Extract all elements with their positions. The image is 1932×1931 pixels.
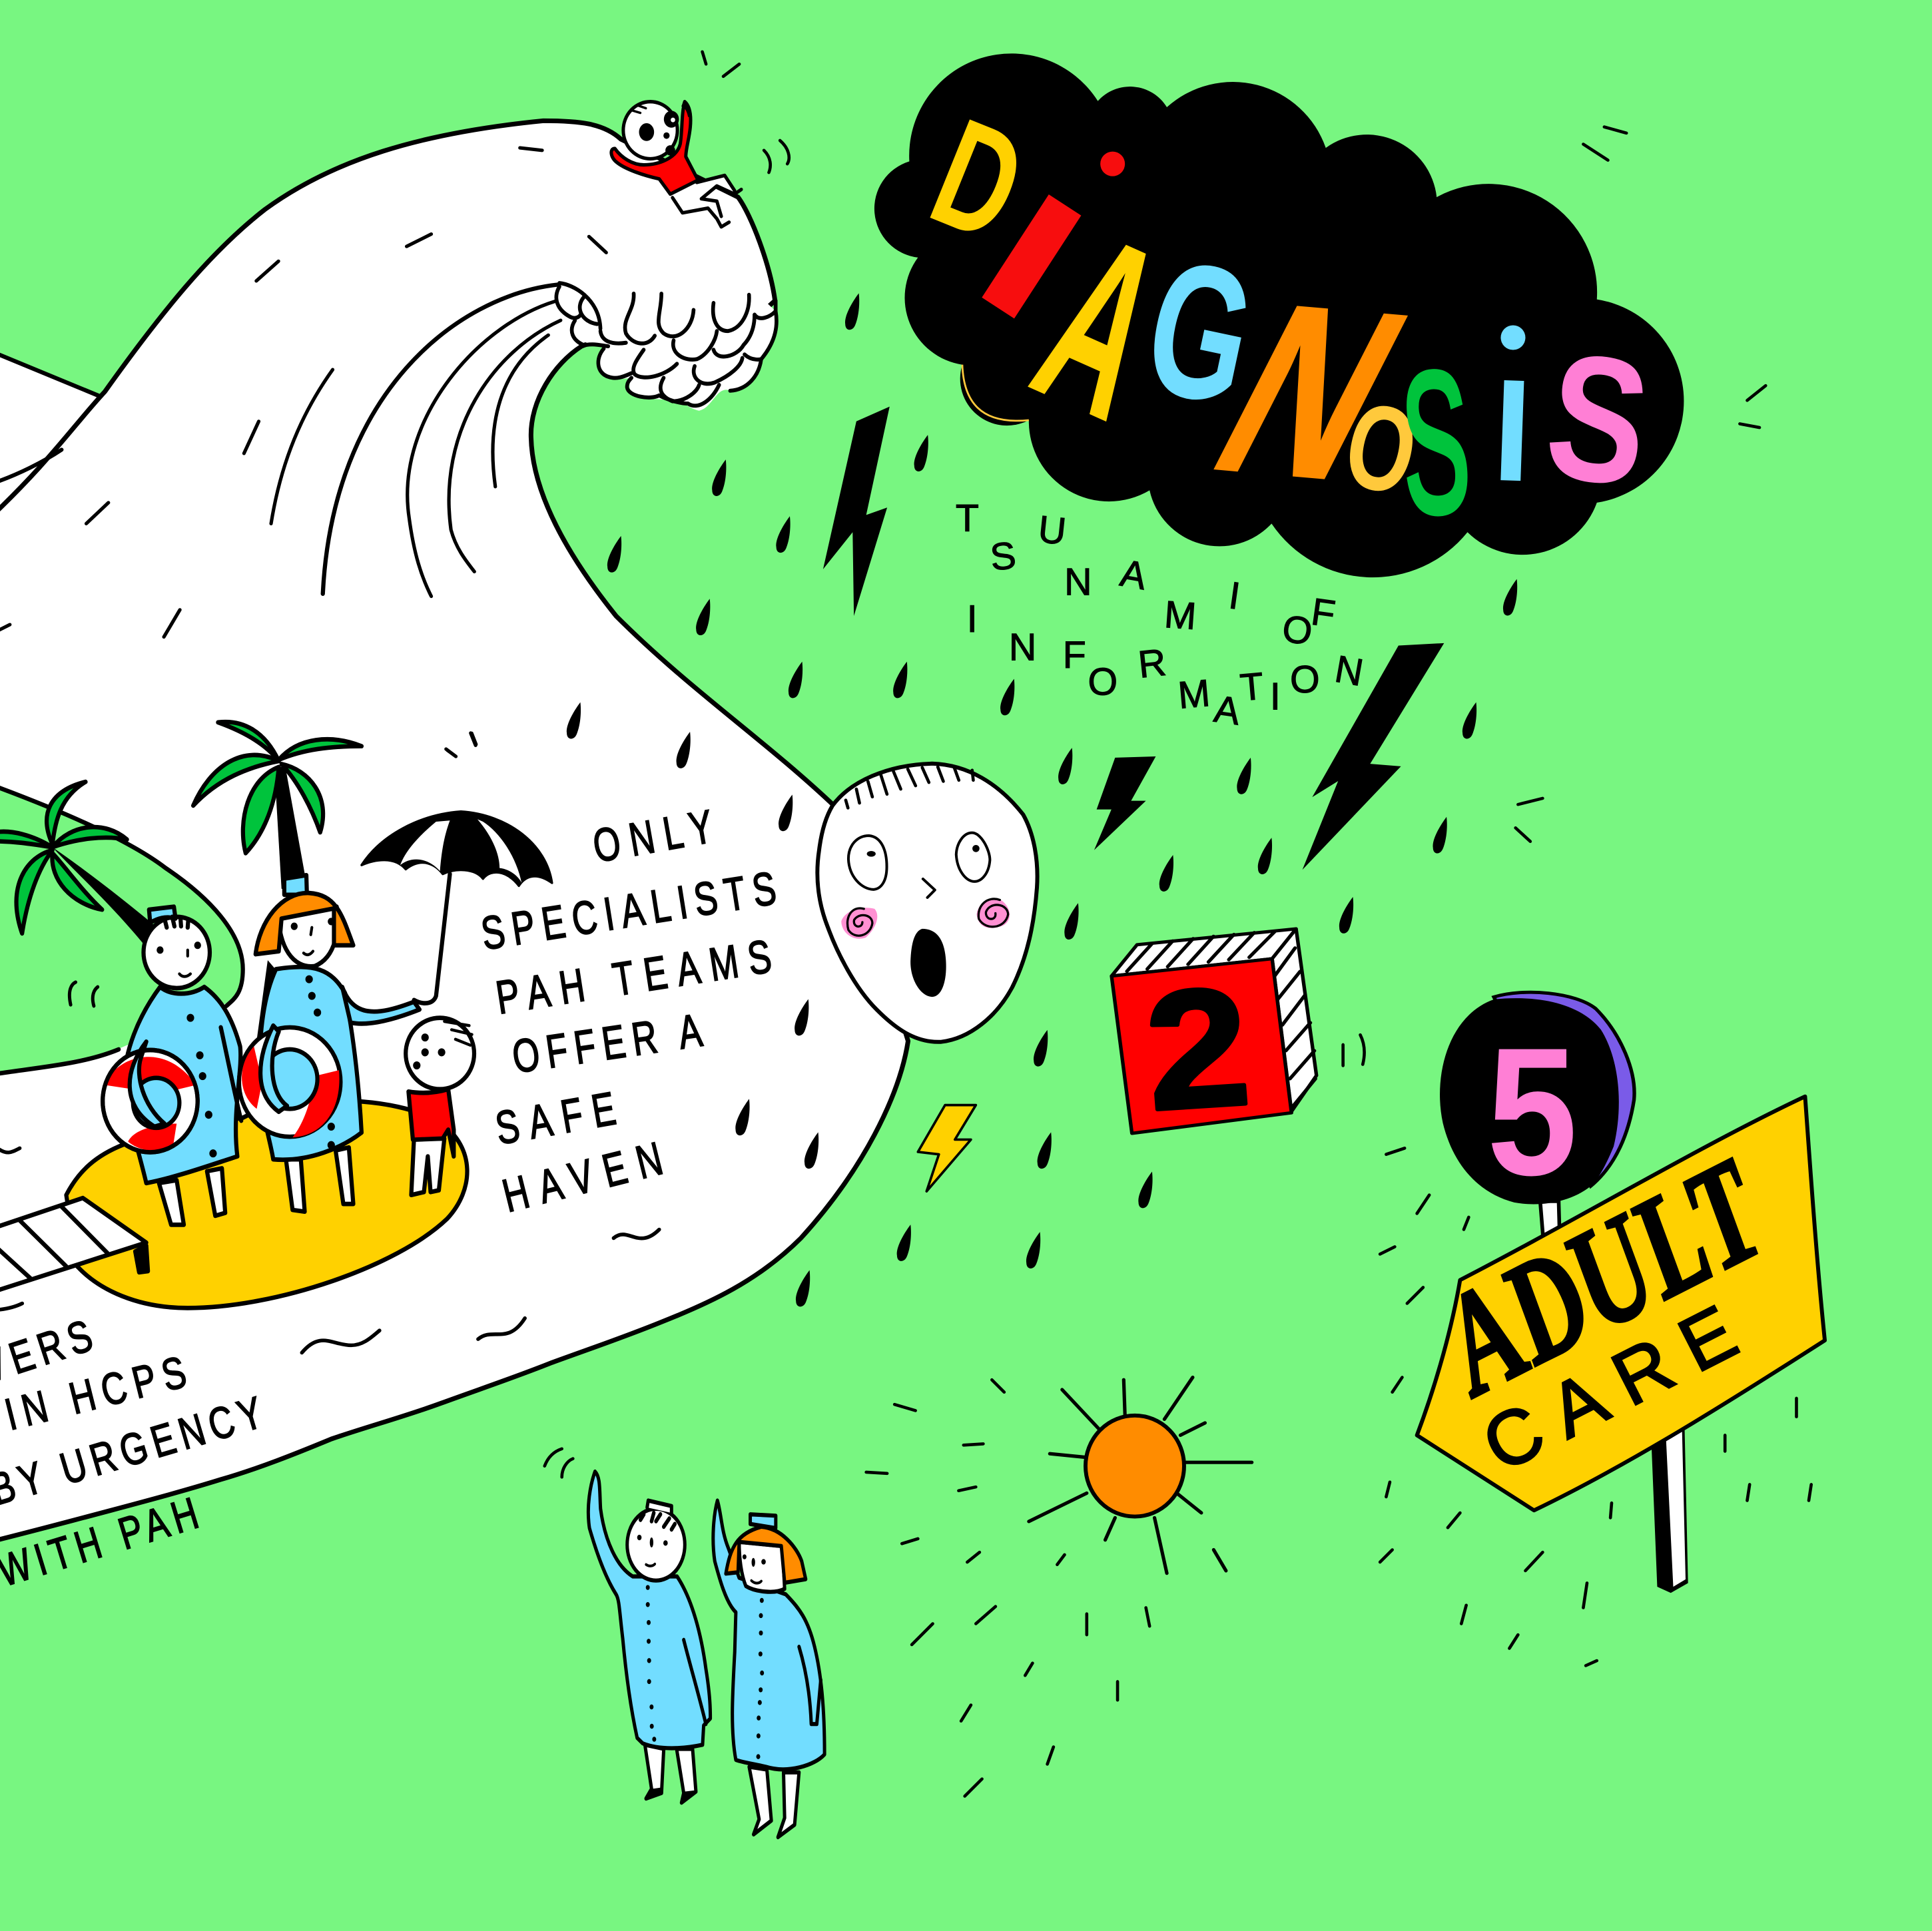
yellow signboard <box>1417 1097 1825 1510</box>
text: cropped wave captions: IN HCPS <box>0 1346 191 1440</box>
text: only specialists PAH teams offer a safe haven: OFFER A <box>509 1004 706 1083</box>
text: only specialists PAH teams offer a safe haven: HAVEN <box>497 1133 668 1223</box>
sand island with nurses, child and umbrella <box>0 722 552 1308</box>
subtitle: tsunami of information: O <box>1290 659 1320 701</box>
screaming face <box>817 764 1038 1042</box>
text: cropped wave captions <box>0 1310 268 1596</box>
badge 5 <box>1440 992 1634 1213</box>
radiating dashes <box>866 1148 1811 1796</box>
subtitle: tsunami of information: F <box>1309 591 1338 636</box>
text: only specialists PAH teams offer a safe haven: PAH TEAMS <box>493 930 775 1024</box>
numbered block 2 <box>1112 929 1317 1145</box>
small motion marks <box>545 52 1766 1477</box>
nurse one with lifebuoy <box>103 907 241 1225</box>
umbrella <box>362 733 552 1003</box>
subtitle: tsunami of information: T <box>1239 665 1265 709</box>
sun <box>1029 1377 1252 1573</box>
title: DIAGNOSIS: S <box>1536 314 1660 525</box>
subtitle: tsunami of information: I <box>1270 676 1281 718</box>
title: DIAGNOSIS: I <box>1490 349 1534 513</box>
rain drops <box>567 293 1517 1306</box>
sign text CARE: CARE <box>1470 1289 1750 1488</box>
subtitle: tsunami of information: S <box>988 534 1018 579</box>
text: only specialists PAH teams offer a safe haven: SPECIALISTS <box>478 862 780 960</box>
subtitle: tsunami of information: T <box>956 497 979 539</box>
waving nurses <box>588 1472 824 1837</box>
waving nurse left <box>588 1472 711 1802</box>
background wave behind <box>0 350 101 555</box>
subtitle: tsunami of information <box>956 497 1367 734</box>
lightning bolts <box>823 407 1444 870</box>
numbered block 2: 2 <box>1139 952 1255 1145</box>
subtitle: tsunami of information: I <box>967 598 978 641</box>
text: only specialists PAH teams offer a safe haven: ONLY <box>589 800 717 873</box>
yellow lightning bolt <box>918 1105 976 1191</box>
title: DIAGNOSIS <box>911 86 1660 556</box>
subtitle: tsunami of information: A <box>1117 552 1150 599</box>
right palm tree <box>193 722 362 1052</box>
yellow island <box>66 1101 467 1308</box>
title: DIAGNOSIS: N <box>1175 253 1447 531</box>
subtitle: tsunami of information: F <box>1063 634 1086 677</box>
title: DIAGNOSIS: A <box>1004 182 1199 471</box>
wave foam crest <box>556 283 777 411</box>
left palm tree <box>0 782 153 946</box>
subtitle: tsunami of information: R <box>1136 641 1168 687</box>
sign posts <box>1540 1201 1688 1593</box>
subtitle: tsunami of information: M <box>1163 593 1197 638</box>
road sign with 5, adult care <box>1413 992 1825 1593</box>
title cloud <box>874 53 1684 577</box>
water ripple marks <box>0 1148 659 1352</box>
title: DIAGNOSIS: O <box>1334 376 1429 521</box>
subtitle: tsunami of information: O <box>1279 607 1315 654</box>
dock <box>0 1198 148 1291</box>
subtitle: tsunami of information: M <box>1176 672 1211 717</box>
subtitle: tsunami of information: I <box>1226 574 1243 618</box>
title: DIAGNOSIS: G <box>1130 218 1270 447</box>
child in red shirt <box>406 1018 474 1195</box>
sign text ADULT: ADULT <box>1413 1128 1790 1427</box>
subtitle: tsunami of information: U <box>1036 508 1068 553</box>
subtitle: tsunami of information: N <box>1064 561 1092 604</box>
subtitle: tsunami of information: N <box>1009 627 1036 669</box>
waving nurse right <box>713 1501 824 1837</box>
person surfing on the wave crest <box>611 101 741 228</box>
left swell line <box>0 449 62 483</box>
badge 5: 5 <box>1486 1009 1578 1213</box>
text: only specialists PAH teams offer a safe haven: SAFE <box>491 1083 619 1155</box>
subtitle: tsunami of information: O <box>1088 661 1118 704</box>
subtitle: tsunami of information: A <box>1211 688 1243 734</box>
nurse two with lifebuoy and umbrella <box>239 875 420 1212</box>
title: DIAGNOSIS: D <box>911 86 1046 274</box>
green island hill and palm tree <box>0 782 243 1076</box>
title: DIAGNOSIS: S <box>1397 330 1474 556</box>
text: only specialists PAH teams offer a safe haven <box>478 800 780 1223</box>
subtitle: tsunami of information: N <box>1332 648 1367 694</box>
title: DIAGNOSIS: I <box>946 152 1118 360</box>
wave curl lines <box>0 148 606 756</box>
